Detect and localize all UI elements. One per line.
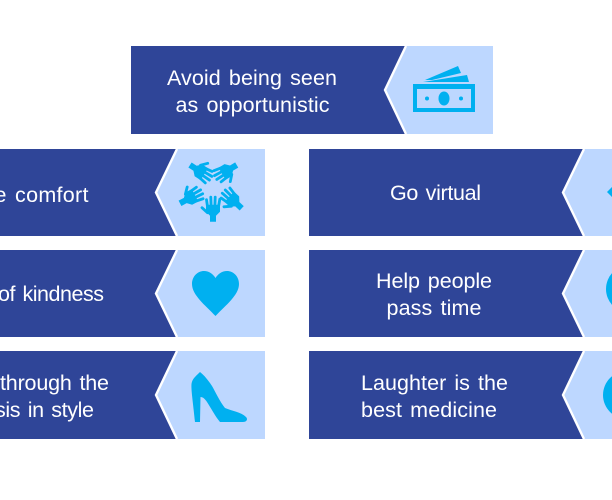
card: help people pass time: Help people	[376, 269, 492, 293]
card: avoid being seen as opportunistic	[131, 46, 493, 134]
card: laughter is the best medicine: Laughter is the	[361, 371, 508, 395]
card: walk through the crisis in style	[0, 351, 265, 439]
icon: clipped face circle	[603, 371, 612, 419]
icon: money banknotes	[413, 66, 475, 112]
card: go virtual: Go virtual	[390, 181, 481, 205]
card: walk through the crisis in style: through the	[0, 371, 109, 395]
icon: heart	[192, 271, 239, 316]
card: kindness	[0, 250, 265, 337]
card: laughter is the best medicine	[309, 351, 612, 439]
icon: clipped diamond	[607, 187, 612, 197]
card: avoid being seen as opportunistic: as opportunistic	[176, 93, 330, 117]
icon: five hands in a circle	[175, 156, 246, 222]
card: comfort	[0, 149, 265, 236]
card: laughter is the best medicine: best medicine	[361, 398, 497, 422]
card: help people pass time: pass time	[386, 296, 482, 320]
card: help people pass time	[309, 250, 612, 337]
card: go virtual	[309, 149, 612, 236]
card: avoid being seen as opportunistic: Avoid being seen	[167, 66, 337, 90]
icon: high heel shoe	[191, 372, 247, 422]
icon: clipped circle	[606, 265, 612, 313]
card: kindness: of kindness	[0, 282, 104, 306]
